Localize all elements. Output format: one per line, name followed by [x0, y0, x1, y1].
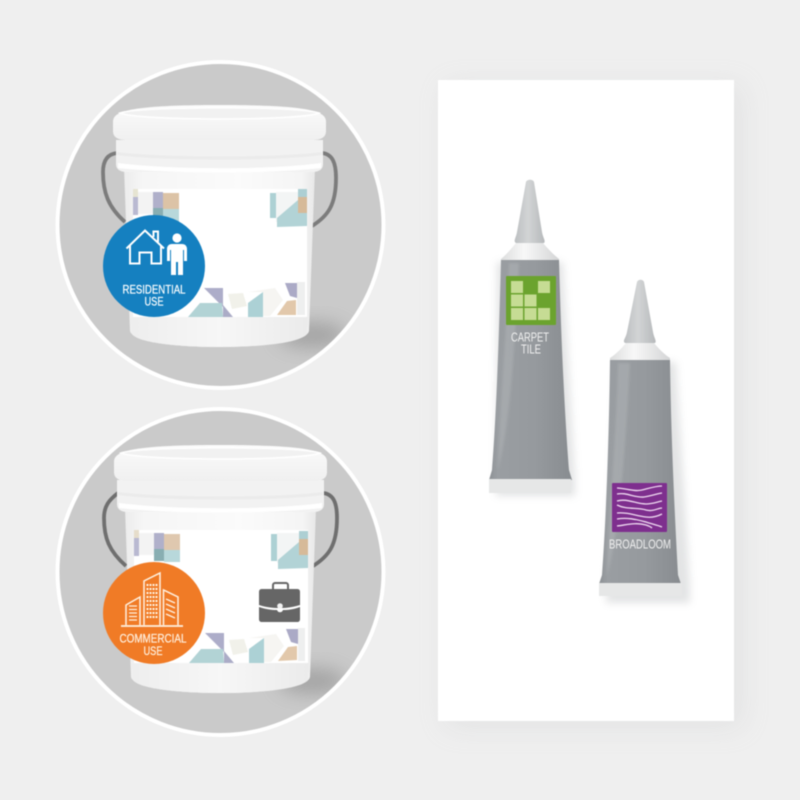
badge: commercial use: USE	[144, 644, 162, 658]
bucket label	[134, 530, 308, 663]
badge: commercial use	[103, 562, 205, 664]
badge text: RESIDENTIAL	[122, 282, 186, 296]
badge: residential use	[103, 215, 205, 317]
broadloom swatch	[612, 483, 667, 532]
panel: residential circle	[58, 62, 384, 388]
icon: person	[167, 233, 187, 275]
bucket shadow	[278, 322, 346, 348]
icon: office buildings	[121, 573, 183, 626]
tube text: BROADLOOM	[609, 538, 671, 552]
icon: commercial bucket	[104, 445, 337, 693]
icon: carpet tile tube	[489, 180, 575, 496]
icon: house	[126, 230, 164, 264]
icon: broadloom tube	[599, 280, 690, 603]
panel: white card with adhesive tubes	[438, 80, 742, 727]
badge text: COMMERCIAL	[120, 632, 187, 646]
panel: commercial circle	[58, 409, 384, 735]
icon: briefcase	[259, 583, 300, 622]
badge: residential use: USE	[144, 294, 164, 308]
icon: carpet tile tube: TILE	[521, 342, 541, 356]
tube text: CARPET	[511, 330, 549, 344]
bucket label	[133, 189, 307, 317]
icon: residential bucket	[103, 105, 336, 347]
bucket shadow	[278, 668, 346, 694]
carpet tile swatch	[506, 276, 556, 325]
